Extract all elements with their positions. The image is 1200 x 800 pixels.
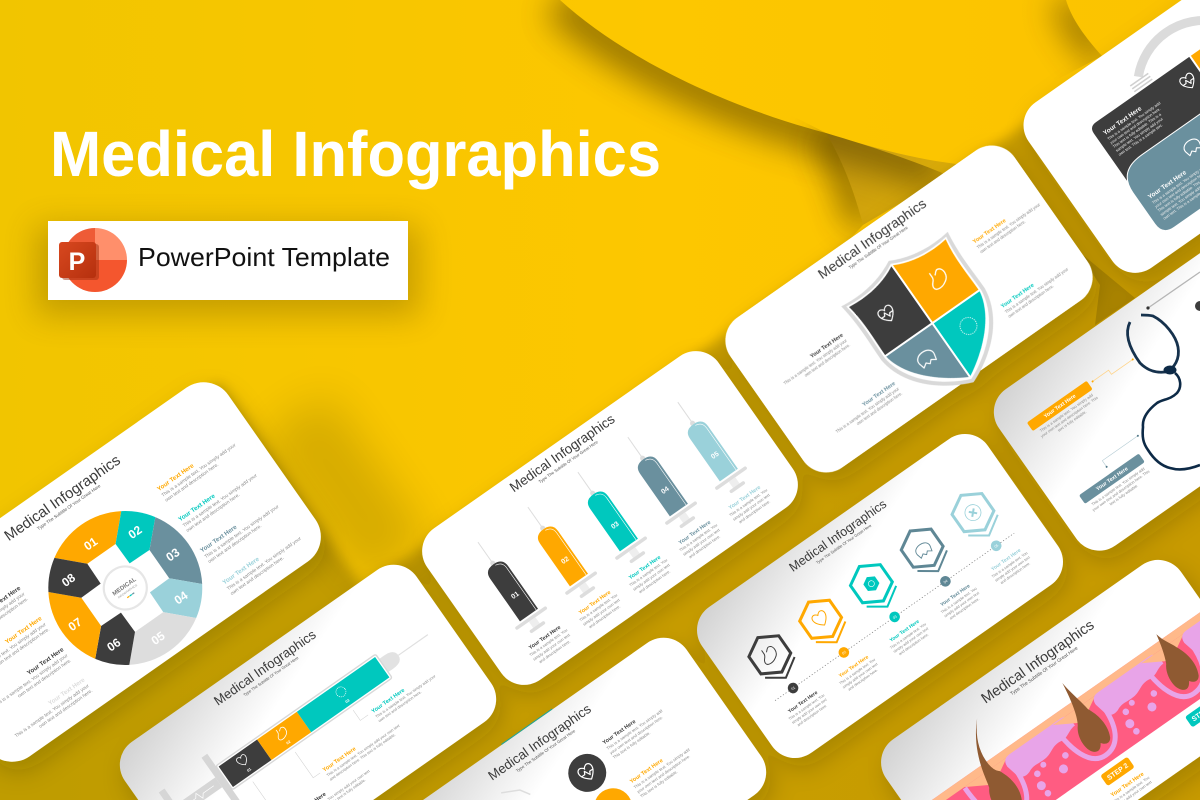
panel: dark shape: your own text and description here. [1109,106,1161,145]
text block: stomach: own text and description here. [979,219,1027,254]
text blocks: syringe captions: Your Text Here [628,555,662,581]
callout: step 2: Your Text Here [1110,771,1145,799]
timeline nodes: 01 [791,686,796,691]
subtitle: Type The Subtitle Of Your Great Here [815,522,873,565]
callout: 02: This is a sample text. You simply add your own text [325,722,401,778]
panel: slide with stethoscope [968,183,1200,562]
subtitle: Type The Subtitle Of Your Great Here [848,225,909,270]
text block: cell: This is a sample text. You simply add your [1004,266,1070,314]
icon: hexagon 2 [794,591,852,653]
icon: gray ring [1117,5,1200,92]
timeline nodes [786,538,1004,695]
callout: step 3 [1185,698,1200,728]
subtitle: Type The Subtitle Of Your Great Here [515,728,577,773]
text blocks: syringe captions: and description here. [588,604,621,629]
text block: right column: Your Text Here [156,462,196,493]
panel: slide with shield [714,135,1107,488]
chart: eight segment wheel: 04 [172,588,191,607]
panel: dark shape: own text. This is a sample text. [1117,122,1164,157]
text blocks: syringe captions [525,482,775,667]
panel: slide with text shapes [1013,0,1200,284]
subtitle: Type The Subtitle Of Your Great Here [36,483,102,531]
chart: syringe 04: 04 [660,486,671,496]
center label: INFOGRAPHICS [117,583,138,599]
text block: right column: Your Text Here [199,524,239,554]
chart: eight segment wheel: 05 [149,629,168,648]
timeline nodes: 05 [994,543,999,549]
text block: stomach: This is a sample text. You simply add your [976,202,1042,250]
callout: orange label: This is a sample text. You simply add [1039,392,1094,433]
text block: first item: This is a sample text. You simply add [606,708,664,751]
heading: Medical Infographics [211,627,319,708]
icon: heart [876,304,898,325]
timeline nodes: 03 [892,615,898,620]
text blocks: timeline captions: and description here. [949,597,980,621]
chart: syringe 05 [662,391,754,499]
icon: hexagon 1 [743,627,801,688]
panel: dark shape: Your Text Here [1102,105,1144,137]
text blocks: syringe captions: simply add your own text [682,527,721,557]
text blocks: timeline captions: This is a sample text. You [889,622,927,650]
text blocks: timeline captions: This is a sample text. You [991,551,1028,579]
panel: dark shape: sample text. You simply add your [1114,116,1164,153]
icon: stethoscope [1127,272,1200,469]
chart: syringe 03: 03 [610,521,621,531]
timeline nodes: 02 [841,650,847,656]
subtitle: Type The Subtitle Of Your Great Here [538,439,599,484]
callout: slate label: This is a sample text. You simply add [1090,466,1145,507]
text block: left column: Your Text Here [47,676,87,707]
text blocks: syringe captions: and description here. [538,639,571,664]
chart: eight segment wheel: 01 [81,534,100,553]
center label [95,558,155,618]
illustration: follicle right [1141,621,1200,700]
heading: Medical Infographics [485,701,594,783]
subtitle: Type The Subtitle Of Your Great Here [242,655,300,697]
chart: syringe bar: 02 [286,740,291,745]
text blocks: syringe captions: and description here. [638,569,671,594]
icon: stomach [925,266,951,291]
text blocks: timeline captions: Your Text Here [990,548,1022,573]
panel: slide with hexagon timeline [686,423,1074,769]
text block: right column: This is a sample text. You simply add your [226,536,303,592]
title: Medical Infographics [50,118,661,190]
heading: Medical Infographics [815,195,929,282]
text block: brain: This is a sample text. You simply add your [835,386,901,434]
callout: 02 [295,694,404,789]
heading: Medical Infographics [1,452,124,545]
chart: eight segment wheel [18,481,233,695]
text blocks: timeline captions: and description here. [797,704,828,727]
chart: shield [836,224,1027,419]
chart: eight segment wheel: 06 [104,635,124,654]
chart: skin layers [932,612,1200,800]
panel: slide with horizontal syringe [109,554,507,800]
callout: 03 [353,660,440,731]
chart: syringe 02: 02 [560,556,571,566]
text block: first item [602,702,670,760]
callout: 01 [253,723,374,800]
chart: eight segment wheel: 03 [163,545,183,564]
illustration: follicle left [962,716,1075,800]
heading: Medical Infographics [507,411,618,495]
text block: right column: own text and description here. [185,492,241,534]
callout: 02: Your Text Here [322,746,357,773]
text block: left column: Your Text Here [4,615,44,646]
icon: hexagon 4 [895,520,954,582]
text blocks: syringe captions: This is a sample text. You [678,522,718,553]
chart: syringe 05: 05 [710,451,721,461]
panel: slide with numbered circles [379,626,777,800]
text block: heart: This is a sample text. You simply add your [783,338,848,386]
icon: PowerPoint logo: P [69,248,85,276]
text block: cell: own text and description here. [1007,283,1055,319]
icon: hexagon 3 [844,556,903,617]
text block: right column: This is a sample text. You simply add your [161,442,238,499]
timeline line [775,533,1014,701]
text blocks: syringe captions: simply add your own text [532,632,572,662]
text blocks: timeline captions: and description here. [898,633,930,656]
text block: right column: Your Text Here [177,492,217,523]
text block: right column [156,436,306,597]
text block: right column: Your Text Here [221,555,261,586]
panel: dark shape: This text is fully editable. This is a [1112,111,1163,149]
heading: Medical Infographics [979,617,1097,707]
text block: second item: This is a sample text. You simply add [633,747,691,790]
callout: 03: own text and description here. [377,689,422,723]
text block: second item: your own text and description here. [636,754,691,794]
text blocks: syringe captions: and description here. [738,499,771,524]
text block: right column: This is a sample text. You simply add your [204,504,281,560]
panel: slide with eight-part circle [0,370,333,774]
chart: syringe bar: 01 [246,767,252,773]
panel: dark shape [1089,57,1200,184]
text block: second item: This text is fully editable. [639,769,678,799]
heading: Medical Infographics [787,497,889,575]
text block: cell: Your Text Here [1000,283,1036,310]
callout: step 2 [1096,753,1153,800]
text block: brain: Your Text Here [862,381,897,408]
chart: syringe bar: 03 [345,698,350,704]
text blocks: timeline captions: simply add your own text [943,591,981,618]
illustration: follicle center [1053,654,1164,762]
text blocks: timeline captions: This is a sample text. You [788,693,825,721]
icon: hexagon 5 [946,484,1005,546]
badge: PowerPoint Template [36,221,420,316]
chart: syringe 02 [512,496,604,604]
text blocks: syringe captions: Your Text Here [528,625,562,651]
callout: slate label: your own text and description here. This [1091,469,1150,512]
text block: first item: your own text and description here. [609,715,664,755]
text blocks: timeline captions: This is a sample text. You [839,658,876,686]
callout: step 2: STEP 2 [1106,762,1130,782]
text block: left column [0,585,94,744]
text blocks: syringe captions: Your Text Here [728,485,762,511]
callout: 03: Your Text Here [371,688,406,715]
text block: right column: own text and description here. [207,523,263,565]
chart: syringe 01 [462,531,554,639]
callout: orange label: your own text and description here. This [1039,395,1099,439]
chart: syringe 03 [562,461,654,569]
text block: second item [629,741,698,799]
text blocks: timeline captions: simply add your own text [791,697,828,725]
chart: eight segment wheel: 07 [66,615,85,634]
panel: orange shape [1191,0,1200,97]
icon: cell [957,314,980,338]
text blocks: timeline captions: and description here. [847,668,879,692]
text block: heart: own text and description here. [803,342,851,378]
chart: eight segment wheel: 08 [59,570,78,590]
text block: first item: Your Text Here [602,719,637,746]
icon: left gray outline [501,780,530,800]
text blocks: timeline captions: and description here. [1000,561,1031,585]
icon: PowerPoint logo [59,228,127,292]
text blocks: syringe captions: This is a sample text. You [578,592,618,623]
text blocks: timeline captions: Your Text Here [838,654,870,679]
text block: left column: Your Text Here [26,646,66,677]
text block: left column: own text and description here. [17,658,73,699]
text block: right column: own text and description here. [229,555,285,597]
text blocks: syringe captions: This is a sample text. You [528,627,568,658]
chart: eight segment wheel: 02 [126,523,145,542]
text blocks: timeline captions: simply add your own text [842,662,879,689]
text blocks: timeline captions: Your Text Here [939,583,972,608]
panel: slide with five syringes [411,340,809,696]
text blocks: timeline captions: This is a sample text. You [940,587,978,615]
text block: second item: Your Text Here [629,758,664,785]
text block: first item: This text is fully editable. [612,730,651,760]
text blocks: timeline captions: Your Text Here [787,690,819,715]
text block: right column: own text and description here. [164,462,220,504]
subtitle: Type The Subtitle Of Your Great Here [1009,645,1080,697]
callout: slate label: text is fully editable. [1108,483,1139,506]
text block: stomach: Your Text Here [972,218,1007,245]
text block: left column: own text and description here. [38,688,94,730]
text blocks: timeline captions: simply add your own text [994,555,1032,583]
text blocks: syringe captions: Your Text Here [578,590,612,616]
panel: slide with skin cross-section [880,560,1200,800]
icon: dark heart circle [561,746,614,799]
panel: slate shape: Your Text Here [1147,169,1188,201]
accent line [501,709,552,744]
callout: 03: This is a sample text. You simply add your [374,673,437,719]
callout: orange label [1027,351,1144,445]
text blocks: syringe captions: and description here. [688,534,721,559]
timeline nodes: 04 [943,579,948,585]
callout: orange label: text is fully editable. [1057,409,1087,433]
text blocks: timeline captions: Your Text Here [889,619,921,644]
text blocks: timeline captions: simply add your own text [893,626,930,654]
callout: slate label [1070,434,1163,518]
text blocks: syringe captions: simply add your own text [632,562,671,592]
callout: slate label: Your Text Here [1095,466,1129,493]
text blocks: syringe captions: This is a sample text. You [728,487,768,518]
text blocks: syringe captions: simply add your own text [582,597,622,627]
text block: heart: Your Text Here [809,333,845,360]
callout: orange label: Your Text Here [1043,393,1077,420]
chart: syringe 01: 01 [510,591,521,601]
text block: right column: This is a sample text. You simply add your [182,473,259,529]
text blocks: timeline captions [784,545,1034,729]
text blocks: syringe captions: This is a sample text. You [628,557,668,588]
text blocks: syringe captions: simply add your own text [732,492,771,522]
text block: left column: This is a sample text. You simply add your [14,683,91,739]
panel: slate shape [1118,23,1200,235]
text blocks: syringe captions: Your Text Here [678,520,712,546]
icon: brain [915,347,938,369]
badge: PowerPoint Template: PowerPoint Template [138,242,390,272]
text block: brain: own text and description here. [856,391,903,426]
panel: dark shape: This is a sample text. You simply add [1106,100,1161,141]
chart: syringe bar [156,611,446,800]
center label: MEDICAL [112,577,138,597]
callout: 02: and description here. This text is fully editable. [328,732,397,782]
icon: orange circle [587,781,640,800]
chart: syringe 04 [612,426,704,534]
